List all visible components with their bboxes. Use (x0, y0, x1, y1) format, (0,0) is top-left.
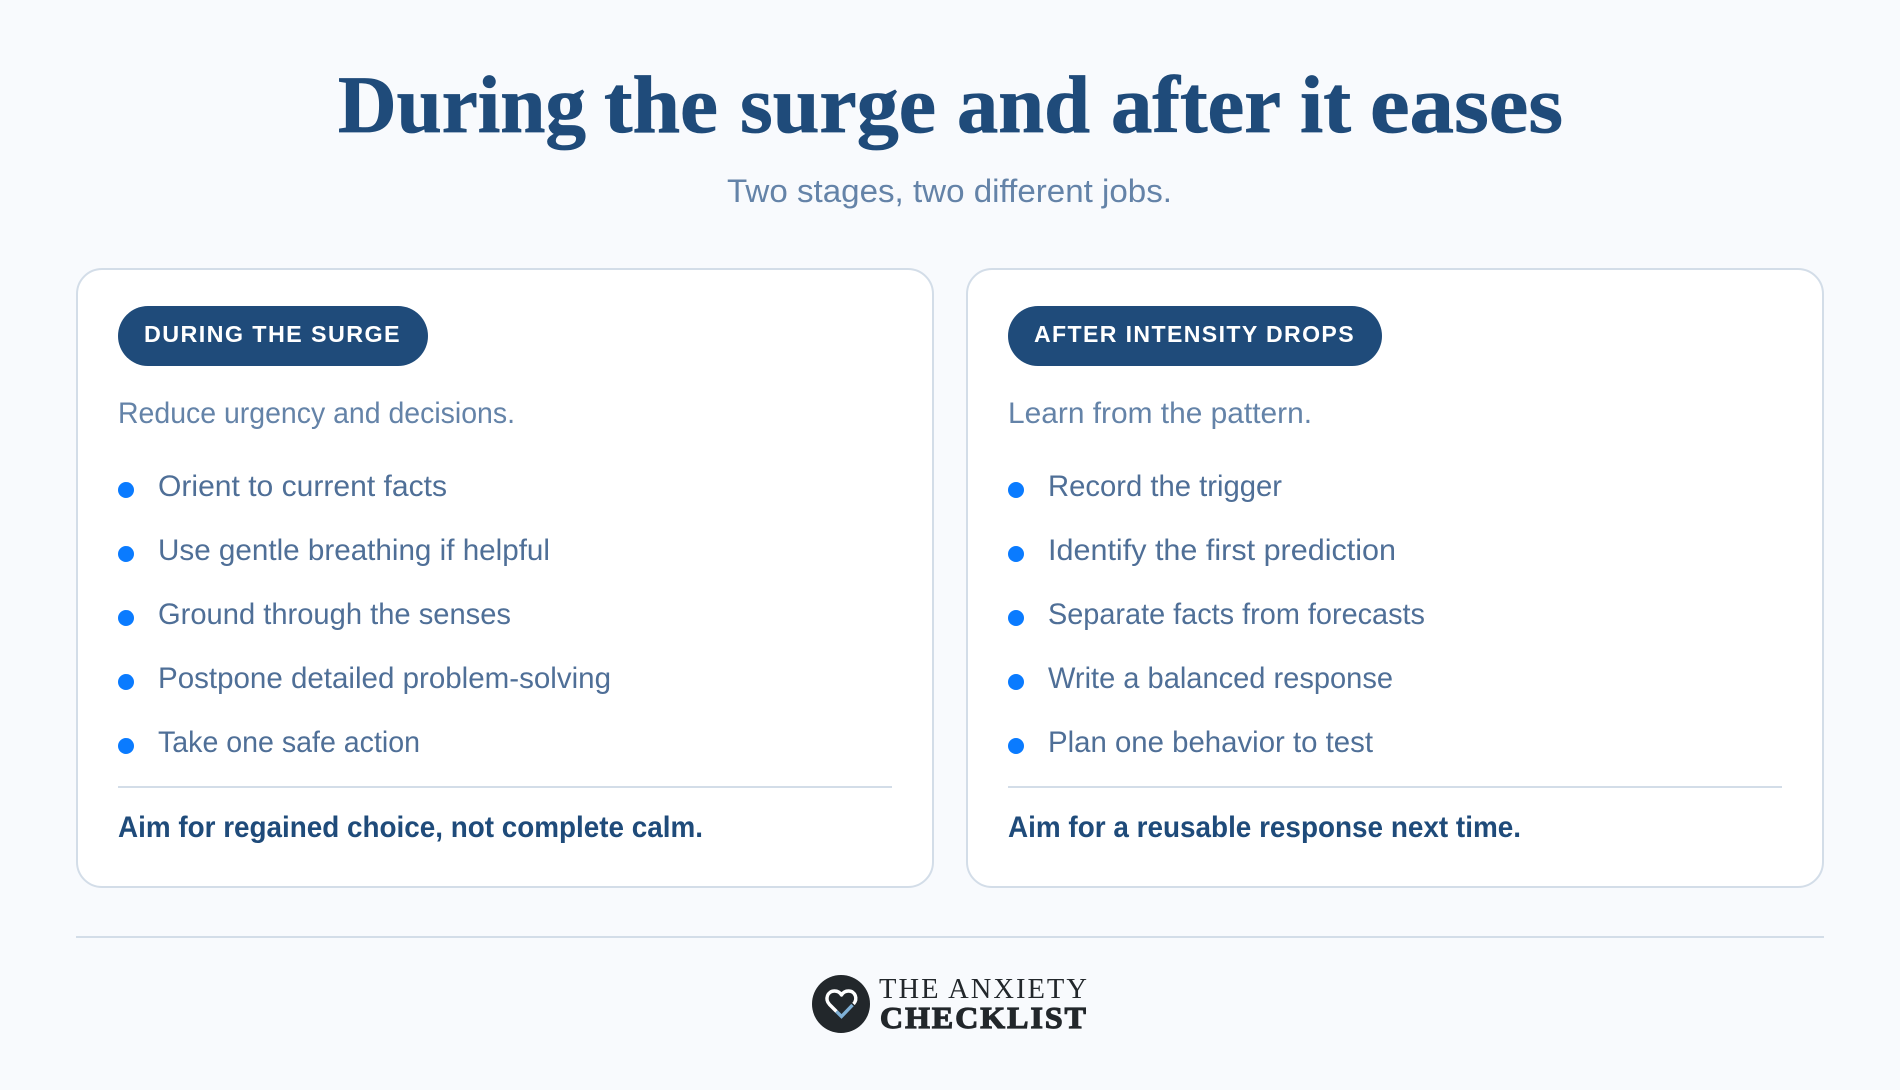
badge: during the surge (118, 306, 428, 366)
list item: ground: Ground through the senses (158, 598, 511, 631)
logo wordmark (879, 974, 1089, 1035)
list item: trigger: Record the trigger (1048, 470, 1282, 503)
title: the (604, 59, 718, 150)
panel background (77, 269, 933, 887)
list item: postpone: Postpone detailed problem-solving (158, 662, 611, 695)
lead text: Learn from the pattern. (1008, 397, 1312, 430)
logo wordmark: CHECKLIST (880, 1000, 1088, 1035)
title: and (957, 59, 1090, 150)
panel background (967, 269, 1823, 887)
logo: The Anxiety Checklist (812, 974, 1089, 1035)
list item: safe action: Take one safe action (158, 726, 420, 759)
badge: after intensity drops: AFTER INTENSITY DROPS (1034, 321, 1355, 347)
icon: heart with check (812, 975, 870, 1033)
logo wordmark: THE ANXIETY (879, 974, 1089, 1005)
title: it (1300, 59, 1351, 150)
badge: during the surge: DURING THE SURGE (144, 321, 401, 347)
title: eases (1370, 59, 1563, 150)
title: During (338, 59, 586, 150)
title: after (1111, 59, 1281, 150)
panel: after intensity drops (967, 269, 1823, 887)
panel: during the surge (77, 269, 933, 887)
badge: after intensity drops (1008, 306, 1382, 366)
list item: prediction: Identify the first prediction (1048, 534, 1396, 567)
lead text: Reduce urgency and decisions. (118, 397, 515, 430)
list item: facts vs forecasts: Separate facts from forecasts (1048, 598, 1425, 631)
title (338, 59, 1563, 150)
aim statement: Aim for regained choice, not complete calm. (118, 811, 703, 844)
title: surge (740, 59, 936, 150)
list item: balanced response: Write a balanced response (1048, 662, 1393, 695)
list item: behavior test: Plan one behavior to test (1048, 726, 1374, 759)
list item: breathing: Use gentle breathing if helpful (158, 534, 550, 567)
aim statement: Aim for a reusable response next time. (1008, 811, 1521, 844)
list item: orient: Orient to current facts (158, 470, 447, 503)
subtitle: Two stages, two different jobs. (727, 173, 1172, 209)
